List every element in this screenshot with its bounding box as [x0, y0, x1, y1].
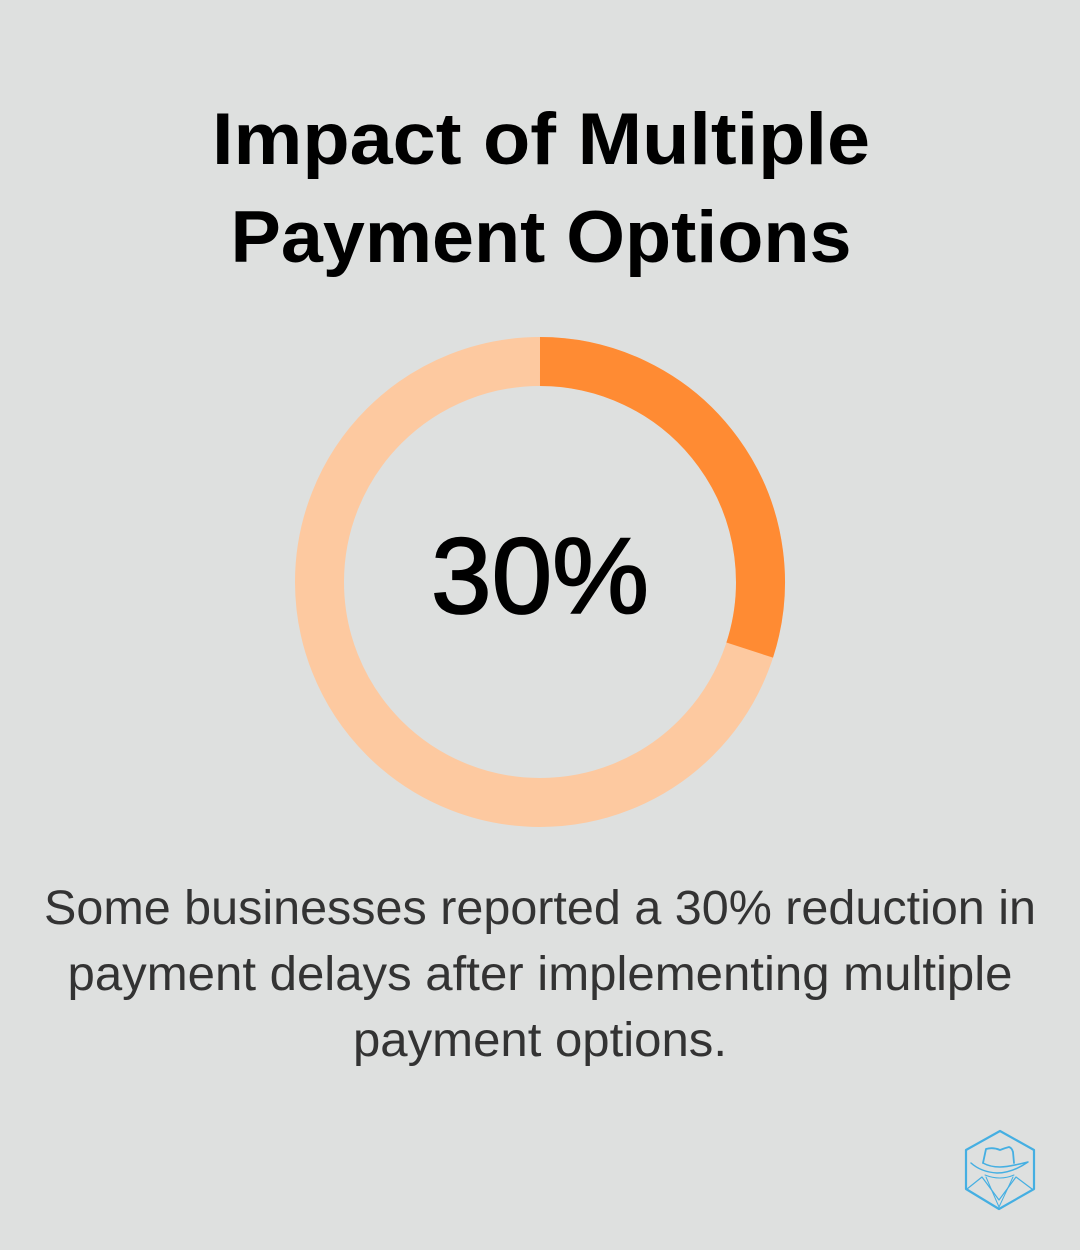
description text: payment options. — [353, 1014, 727, 1067]
donut track — [320, 362, 760, 802]
title: Impact of Multiple — [212, 99, 870, 180]
center value: 30% — [431, 515, 649, 636]
icon: logo, hexagon with hat and coat — [966, 1131, 1034, 1209]
description text: payment delays after implementing multiple — [68, 948, 1013, 1001]
description text — [44, 882, 1036, 1067]
donut chart: 30% — [320, 362, 760, 802]
description text: Some businesses reported a 30% reduction in — [44, 882, 1036, 935]
title: Payment Options — [230, 197, 852, 278]
title — [212, 99, 870, 278]
donut value arc — [540, 362, 760, 650]
